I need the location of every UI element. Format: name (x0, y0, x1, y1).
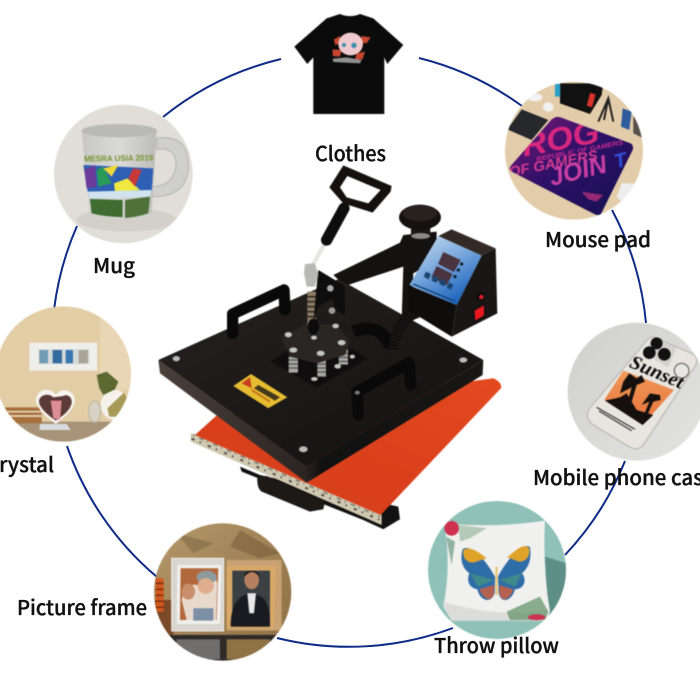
panel: mug: MESRA USIA 2019 (84, 152, 154, 164)
panel: mug (53, 103, 193, 243)
column and arm (333, 232, 437, 320)
panel: picture frame (153, 523, 293, 663)
foam lower platen (191, 433, 382, 525)
plate screws (173, 356, 467, 452)
label: Mouse pad: Mouse pad (545, 223, 651, 253)
red silicone pad (195, 378, 501, 515)
control box (408, 229, 497, 337)
handle highlight (355, 391, 360, 395)
panel: crystal (0, 303, 133, 445)
connector ring (54, 58, 646, 647)
cable hose (353, 313, 418, 351)
upper plate side (158, 360, 483, 483)
rear handle (233, 290, 285, 333)
label: Throw pillow: Throw pillow (434, 629, 559, 659)
panel: mobile phone case: Sunset (626, 352, 687, 394)
label: Picture frame: Picture frame (17, 591, 147, 621)
panel: throw pillow (427, 500, 568, 642)
threaded screw and bracket (307, 270, 345, 335)
label: Clothes: Clothes (315, 137, 386, 167)
panel: mouse pad: JOIN (546, 150, 610, 192)
lower support and handle (240, 467, 400, 529)
label: Mug: Mug (93, 249, 135, 279)
panel: mouse pad: ROG (518, 113, 602, 164)
lever handle (304, 165, 392, 287)
panel: mouse pad (503, 80, 647, 223)
panel: mouse pad: T (612, 148, 631, 173)
adjustment knob (399, 205, 441, 239)
heat press machine (158, 165, 501, 529)
upper plate top (158, 279, 483, 467)
warning label (233, 374, 287, 408)
front handle (357, 363, 411, 415)
spring mount (271, 323, 368, 387)
panel: mouse pad: OF GAMERS (508, 147, 600, 180)
panel: mouse pad: REPUBLIC OF GAMERS (536, 139, 624, 163)
panel: mobile phone case (567, 320, 700, 463)
icon: black t-shirt (294, 14, 403, 114)
